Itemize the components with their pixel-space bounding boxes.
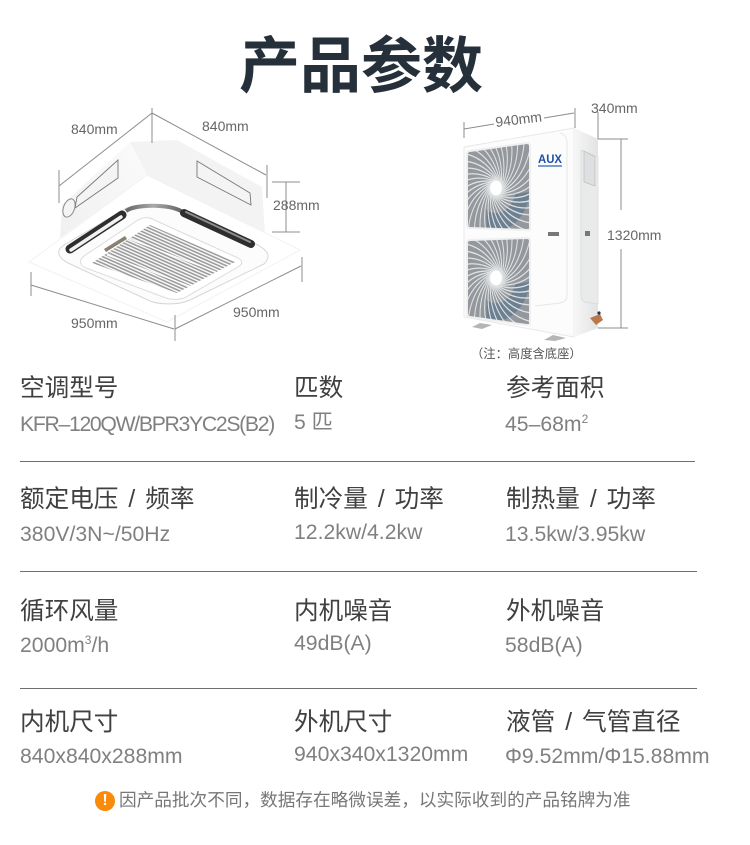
title: 产品参数 (239, 32, 483, 100)
labels: 840mm, 840mm, 288mm, 950mm, 950mm: 950mm (233, 304, 280, 320)
footnote text: 因产品批次不同，数据存在略微误差，以实际收到的产品铭牌为准 (119, 790, 631, 810)
dimension lines (31, 108, 302, 341)
footnote (95, 790, 631, 811)
panel frame (59, 204, 268, 304)
value: pipe diameter: Φ9.52mm/Φ15.88mm (505, 745, 710, 768)
spec: outdoor noise: 外机噪音 (506, 598, 604, 625)
labels: 840mm, 840mm, 288mm, 950mm, 950mm: 840mm (202, 118, 249, 134)
spec: cooling: 制冷量 / 功率 (294, 486, 444, 513)
feet (472, 323, 566, 341)
pipe valves (590, 311, 603, 325)
value: heating: 13.5kw/3.95kw (505, 523, 645, 546)
labels: 940mm, 340mm, 1320mm: 1320mm (607, 227, 661, 243)
side vents (75, 160, 251, 208)
value: cooling: 12.2kw/4.2kw (294, 521, 422, 544)
labels: 840mm, 840mm, 288mm, 950mm, 950mm: 840mm (71, 121, 118, 137)
height note: （注：高度含底座） (471, 346, 582, 361)
value: area: 45–68m2 (505, 412, 588, 436)
value: indoor size: 840x840x288mm (20, 745, 183, 768)
spec: heating: 制热量 / 功率 (506, 486, 656, 513)
spec: airflow: 循环风量 (20, 598, 118, 625)
spec row 1 (20, 375, 604, 436)
side panel detail (581, 150, 598, 304)
value: voltage: 380V/3N~/50Hz (20, 523, 170, 546)
spec: voltage: 额定电压 / 频率 (20, 486, 194, 513)
icon: warning (95, 791, 115, 811)
value: outdoor size: 940x340x1320mm (294, 743, 468, 766)
labels: 840mm, 840mm, 288mm, 950mm, 950mm (71, 118, 320, 331)
value: airflow: 2000m3/h (20, 633, 109, 657)
unit body (60, 140, 265, 238)
outdoor dimension lines (464, 108, 628, 328)
spec: outdoor size: 外机尺寸 (294, 709, 392, 736)
labels: 940mm, 340mm, 1320mm: 340mm (591, 100, 638, 116)
value: model: KFR–120QW/BPR3YC2S(B2) (20, 413, 274, 436)
sensor strip (104, 236, 127, 252)
front face (464, 128, 574, 337)
indoor unit (29, 108, 320, 341)
handles (548, 231, 590, 236)
front access panel (535, 133, 567, 306)
spec: area: 参考面积 (506, 375, 604, 402)
lower fan (466, 237, 531, 326)
ceiling panel (29, 175, 300, 322)
product diagrams (28, 100, 661, 361)
labels: 840mm, 840mm, 288mm, 950mm, 950mm: 288mm (273, 197, 320, 213)
value: horsepower: 5 匹 (294, 411, 333, 434)
spec: indoor noise: 内机噪音 (294, 598, 392, 625)
spec row 4 (20, 709, 710, 768)
AUX logo: AUX (538, 154, 562, 166)
corner arc (126, 206, 181, 211)
spec row 2 (20, 486, 656, 546)
labels: 940mm, 340mm, 1320mm: 940mm (494, 108, 543, 130)
spec: horsepower: 匹数 (294, 375, 343, 402)
spec row 3 (20, 598, 604, 657)
spec: model: 空调型号 (20, 375, 118, 402)
inner panel (80, 218, 242, 299)
spec: indoor size: 内机尺寸 (20, 709, 118, 736)
round port (61, 197, 77, 219)
outdoor unit (464, 104, 660, 360)
icon: warning: ! (102, 792, 108, 809)
intake grille (92, 225, 235, 293)
labels: 940mm, 340mm, 1320mm (494, 100, 661, 243)
upper fan (466, 142, 531, 231)
air outlets (70, 212, 251, 250)
value: outdoor noise: 58dB(A) (505, 634, 583, 657)
value: indoor noise: 49dB(A) (294, 632, 372, 655)
side face (574, 128, 598, 337)
spec: pipe diameter: 液管 / 气管直径 (506, 709, 680, 736)
labels: 840mm, 840mm, 288mm, 950mm, 950mm: 950mm (71, 315, 118, 331)
